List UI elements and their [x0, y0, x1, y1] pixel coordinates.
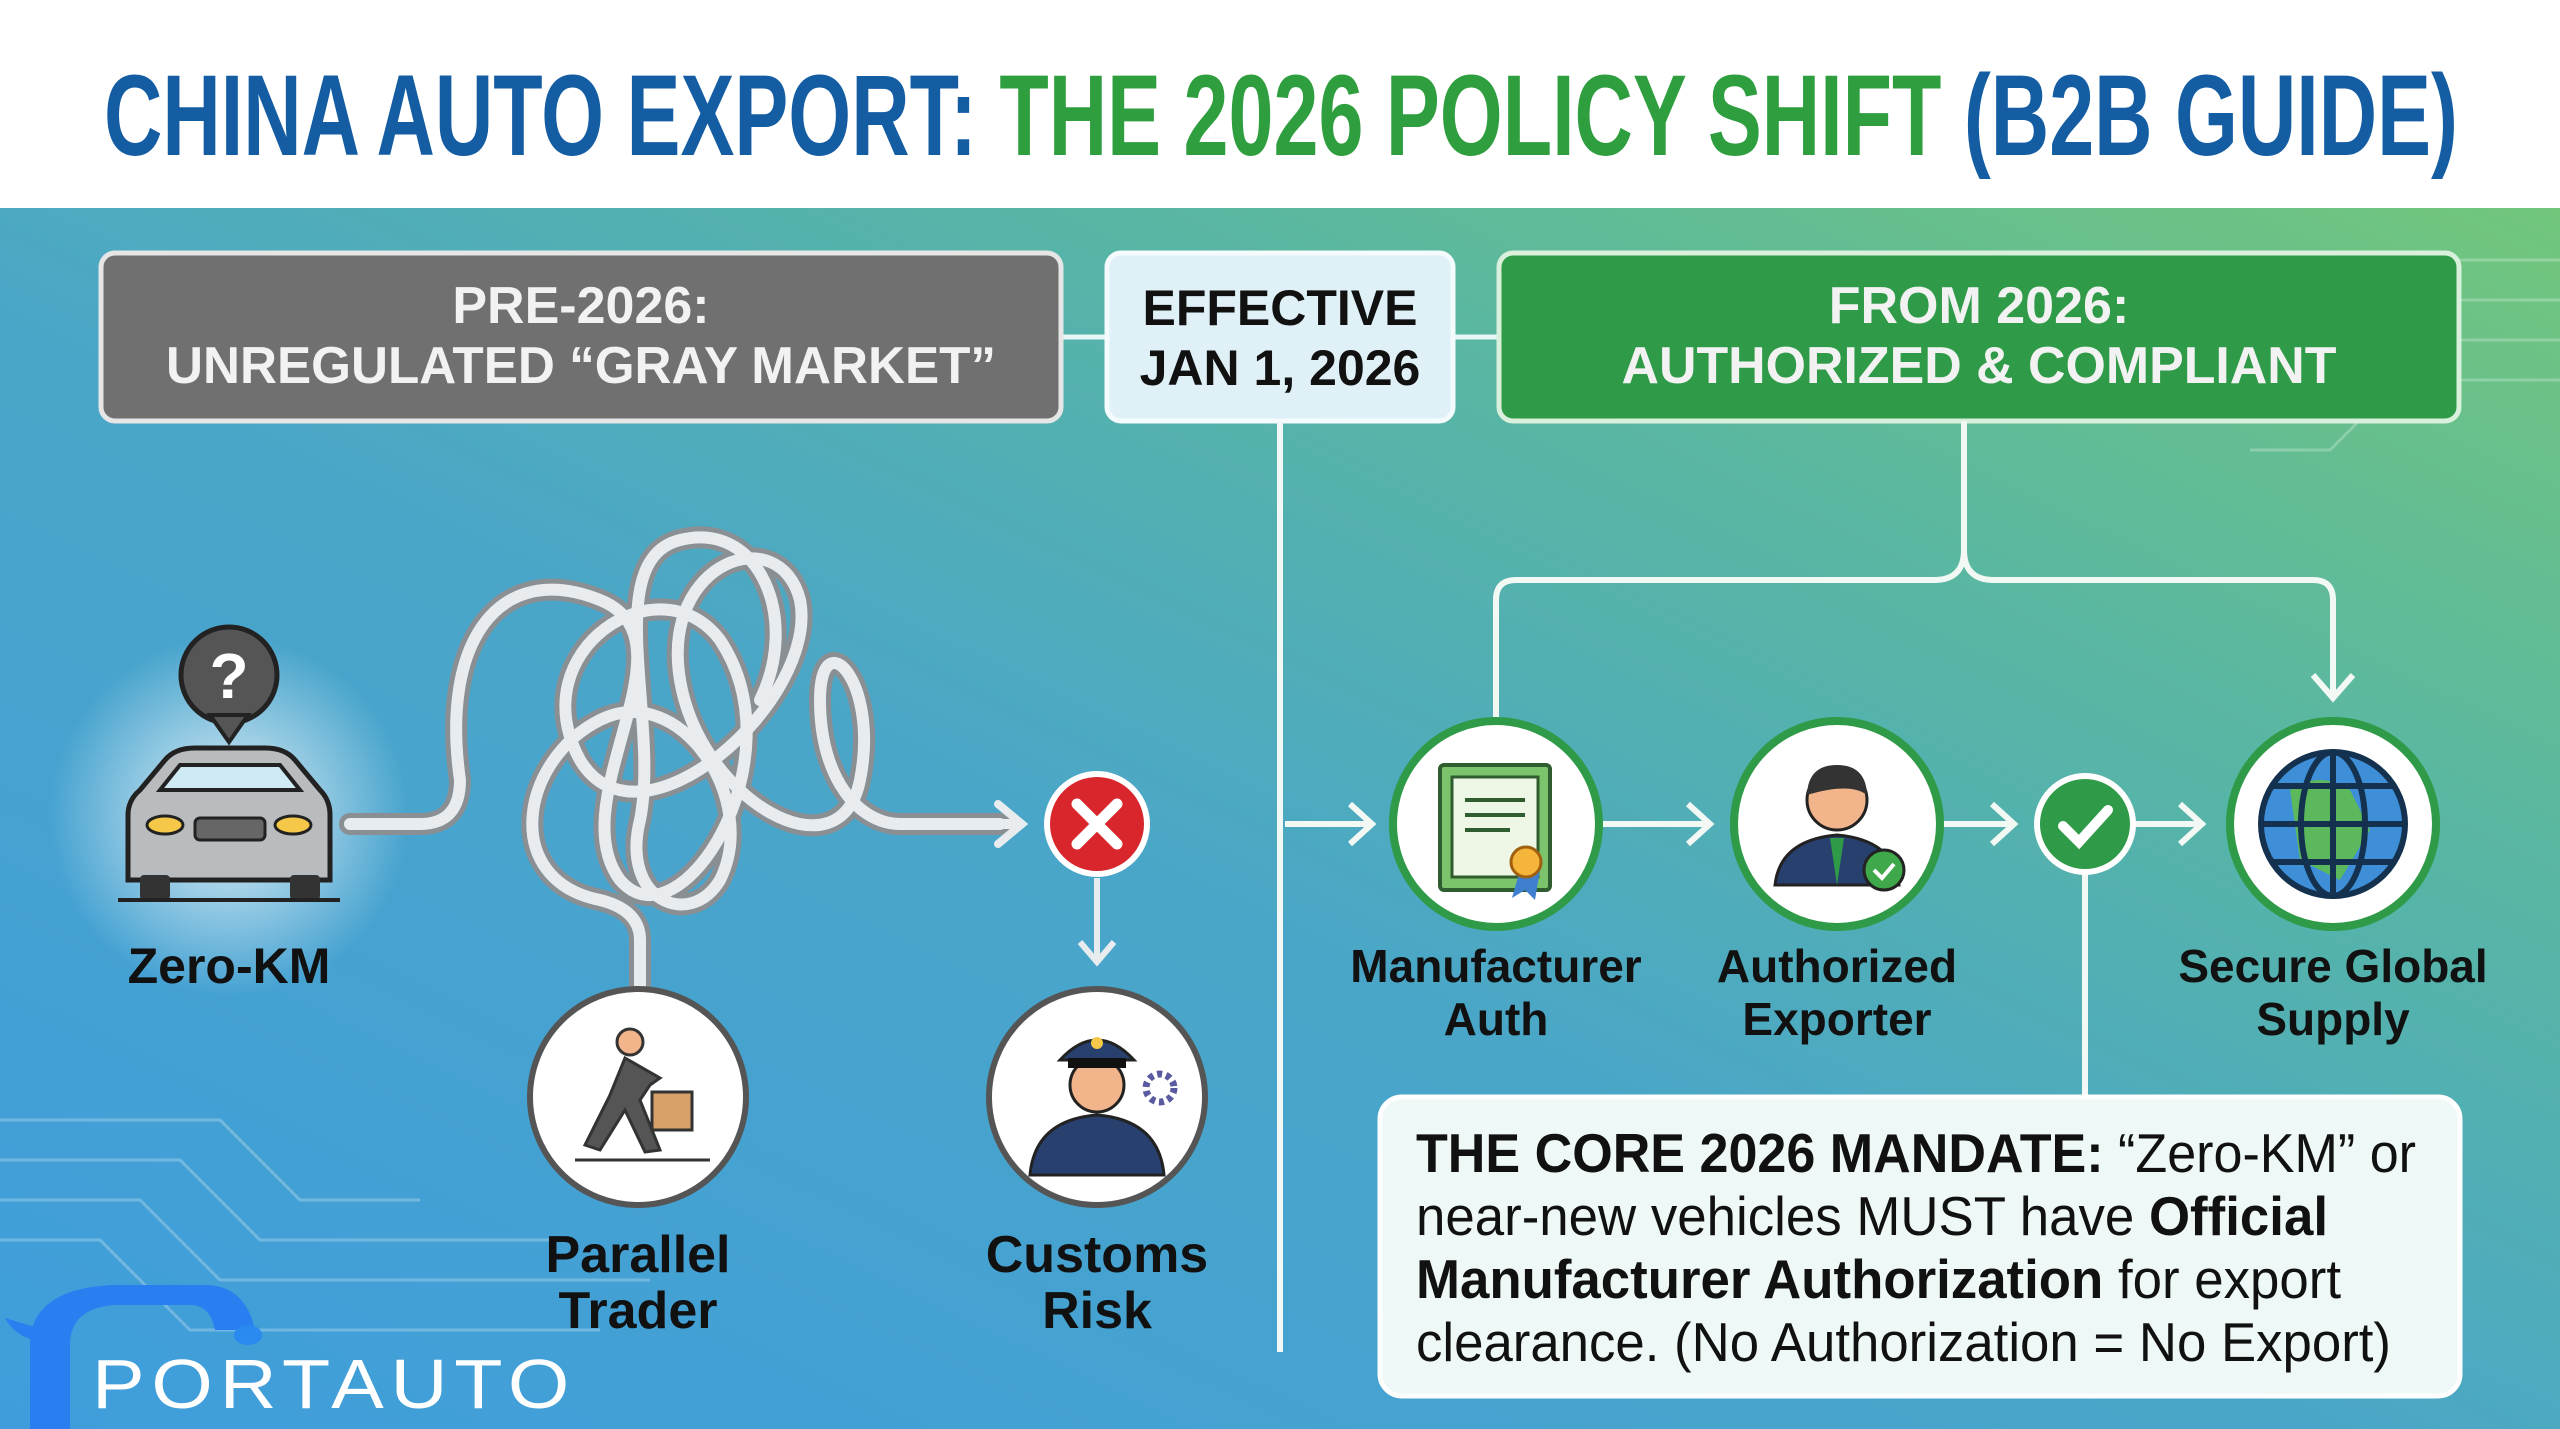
callout: core 2026 mandate: near-new vehicles MUST have Official [1416, 1185, 2328, 1247]
branch connector from green header [1496, 421, 2353, 720]
label: Secure Global Supply: Supply [2256, 993, 2410, 1045]
panel: pre-2026 header: UNREGULATED “GRAY MARKET” [166, 337, 996, 395]
icon: parallel trader [530, 989, 746, 1205]
tangle paths [350, 537, 1022, 985]
divider timeline line [1277, 421, 1283, 1352]
panel: pre-2026 header [101, 253, 1061, 421]
label: Customs Risk: Risk [1042, 1282, 1152, 1340]
panel: effective date: EFFECTIVE [1142, 280, 1418, 336]
label: Authorized Exporter [1717, 940, 1957, 1045]
icon: globe [2230, 721, 2436, 927]
panel: from 2026 header: AUTHORIZED & COMPLIANT [1622, 337, 2337, 395]
label: Customs Risk: Customs [986, 1226, 1208, 1284]
icon: red X [1047, 774, 1147, 874]
logo: PORTAUTO [5, 1285, 576, 1429]
callout: core 2026 mandate: Manufacturer Authorization for export [1416, 1248, 2341, 1310]
label: Zero-KM: Zero-KM [128, 938, 330, 994]
icon: car with question: ? [209, 640, 249, 712]
panel: from 2026 header [1499, 253, 2459, 421]
label: Manufacturer Auth: Auth [1444, 993, 1548, 1045]
callout: core 2026 mandate: THE CORE 2026 MANDATE: “Zero-KM” or [1416, 1122, 2416, 1184]
icon: customs officer [989, 989, 1205, 1205]
icon: authorized exporter [1734, 721, 1940, 927]
header band [0, 0, 2560, 208]
panel: effective date [1107, 253, 1453, 421]
callout: core 2026 mandate: clearance. (No Authorization = No Export) [1416, 1311, 2391, 1373]
label: Parallel Trader: Trader [559, 1282, 717, 1340]
label: Secure Global Supply: Secure Global [2178, 940, 2488, 992]
logo: PORTAUTO: PORTAUTO [92, 1345, 576, 1423]
label: Customs Risk [986, 1226, 1208, 1340]
label: Secure Global Supply [2178, 940, 2488, 1045]
panel: pre-2026 header: PRE-2026: [452, 277, 710, 335]
icon: car with question [49, 627, 409, 996]
flow arrows right side [1285, 804, 2202, 1097]
label: Parallel Trader [545, 1226, 731, 1340]
label: Parallel Trader: Parallel [545, 1226, 731, 1284]
connector lines between headers [1061, 334, 1499, 340]
label: Manufacturer Auth [1350, 940, 1642, 1045]
icon: green check [2037, 776, 2133, 872]
panel: effective date: JAN 1, 2026 [1140, 340, 1420, 396]
label: Manufacturer Auth: Manufacturer [1350, 940, 1642, 992]
icon: manufacturer certificate [1393, 721, 1599, 927]
callout: core 2026 mandate [1380, 1097, 2460, 1396]
label: Authorized Exporter: Exporter [1742, 993, 1932, 1045]
panel: from 2026 header: FROM 2026: [1829, 277, 2129, 335]
arrow: down to customs [1080, 878, 1114, 962]
label: Authorized Exporter: Authorized [1717, 940, 1957, 992]
